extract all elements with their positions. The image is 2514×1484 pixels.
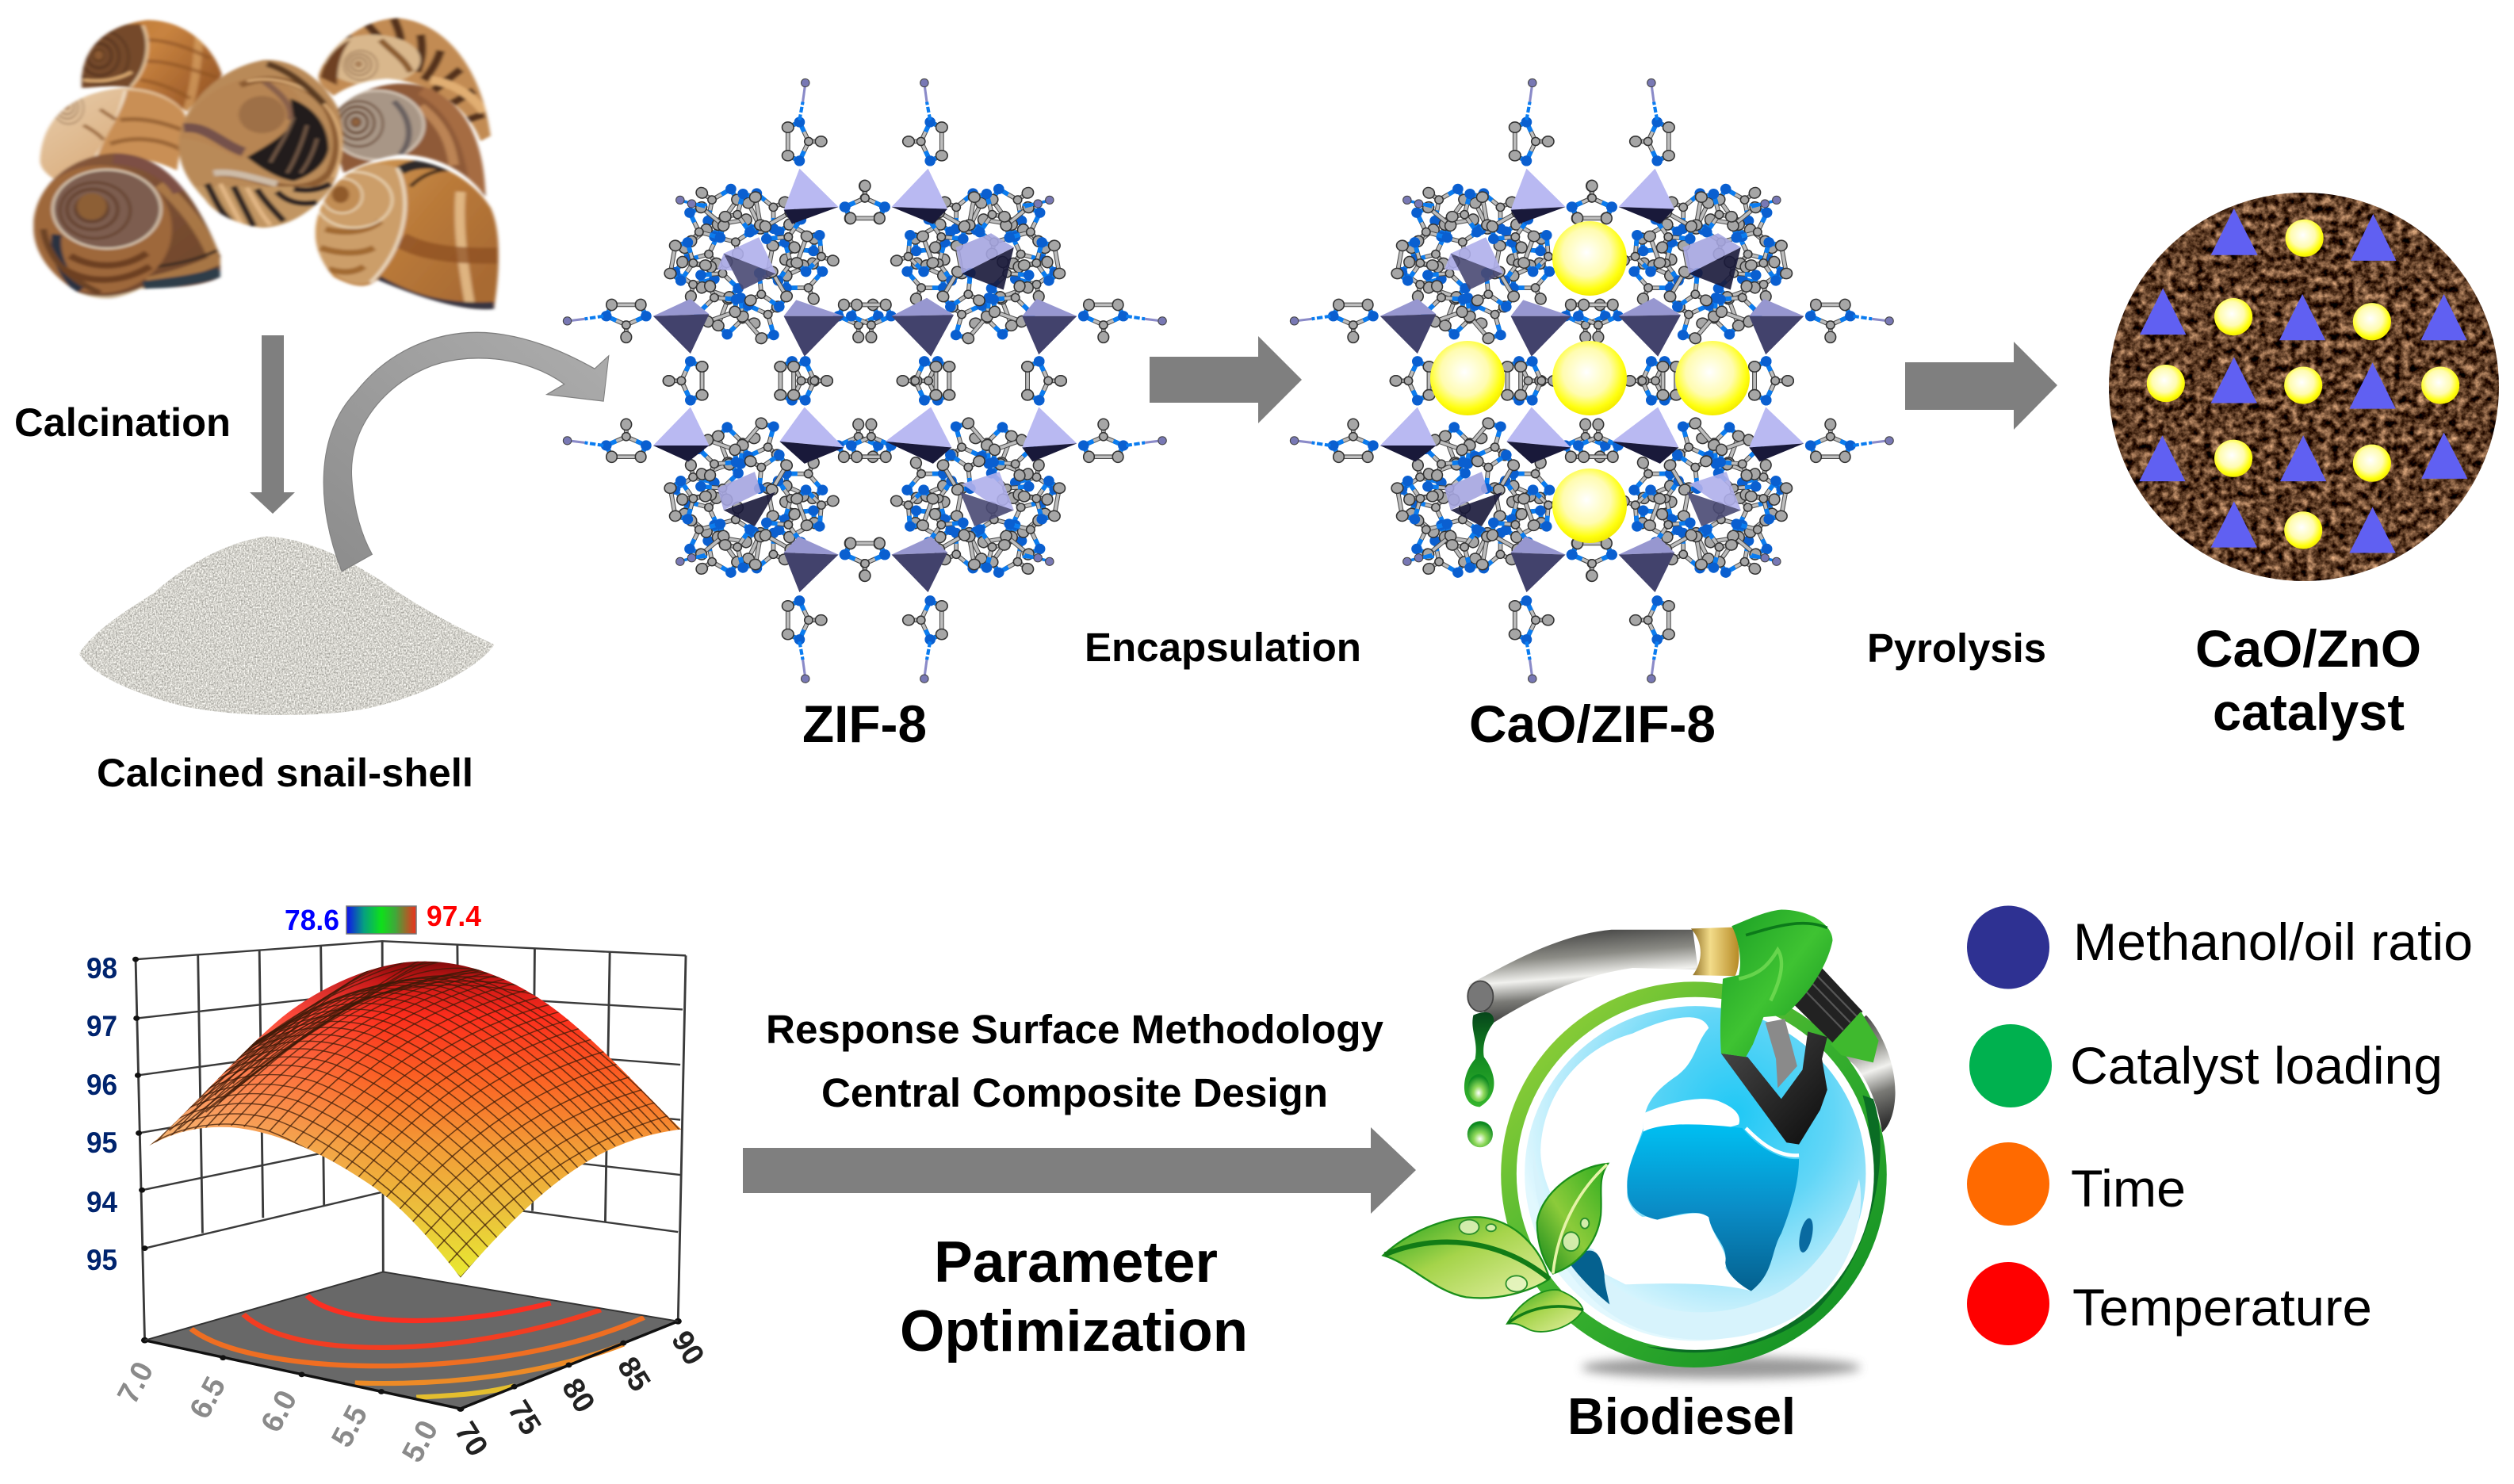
x axis labels: temperature: 70 bbox=[448, 1417, 494, 1463]
y axis labels: 96 bbox=[86, 1069, 117, 1101]
x axis labels: temperature bbox=[448, 1325, 710, 1463]
arrow: optimization to biodiesel bbox=[743, 1127, 1416, 1214]
label: Encapsulation: Encapsulation bbox=[1085, 625, 1361, 670]
y axis labels: 98 bbox=[86, 952, 117, 985]
icon: biodiesel globe with fuel nozzle bbox=[1383, 910, 1896, 1379]
x axis labels: temperature: 80 bbox=[555, 1373, 601, 1419]
plot: walls, floor and surface bbox=[132, 940, 687, 1412]
label: CaO/ZIF-8: CaO/ZIF-8 bbox=[1469, 694, 1716, 753]
x axis labels: ratio: 7.0 bbox=[111, 1356, 160, 1409]
legend item: catalyst loading bbox=[1969, 1024, 2443, 1107]
legend item: temperature: Temperature bbox=[2072, 1278, 2372, 1337]
legend item: methanol/oil ratio: Methanol/oil ratio bbox=[2073, 912, 2473, 971]
label: Central Composite Design: Central Composite Design bbox=[821, 1070, 1328, 1115]
x axis labels: ratio: 6.5 bbox=[183, 1371, 232, 1425]
legend item: time bbox=[1967, 1142, 2186, 1226]
arrow: encapsulation bbox=[1150, 336, 1302, 423]
label: ZIF-8: ZIF-8 bbox=[802, 694, 927, 753]
y axis labels: 94 bbox=[86, 1186, 117, 1218]
legend item: temperature bbox=[1967, 1262, 2372, 1345]
photo: snail shells bbox=[29, 16, 503, 312]
label: Biodiesel: Biodiesel bbox=[1567, 1387, 1796, 1445]
label: CaO/ZnO catalyst bbox=[2195, 619, 2421, 741]
photo: calcined powder heap bbox=[78, 537, 494, 715]
label: Parameter Optimization: Parameter bbox=[934, 1230, 1218, 1295]
ZIF-8 framework bbox=[563, 78, 1166, 683]
y axis labels: 95 bbox=[86, 1244, 117, 1276]
label: Calcined snail-shell: Calcined snail-shell bbox=[97, 751, 473, 795]
CaO/ZnO catalyst particle bbox=[2109, 193, 2499, 581]
x axis labels: ratio: 6.0 bbox=[254, 1385, 304, 1438]
label: CaO/ZnO catalyst: CaO/ZnO bbox=[2195, 619, 2421, 678]
y axis labels bbox=[86, 952, 117, 1276]
x axis labels: ratio bbox=[111, 1356, 445, 1468]
legend item: time: Time bbox=[2071, 1159, 2186, 1218]
colour scale: 78.6 bbox=[285, 904, 339, 936]
arrow: calcination bbox=[250, 335, 295, 514]
x axis labels: temperature: 75 bbox=[501, 1395, 547, 1441]
legend item: methanol/oil ratio bbox=[1967, 905, 2473, 989]
legend item: catalyst loading: Catalyst loading bbox=[2070, 1036, 2443, 1095]
label: Parameter Optimization bbox=[900, 1230, 1248, 1364]
label: Pyrolysis: Pyrolysis bbox=[1867, 625, 2046, 671]
label: CaO/ZnO catalyst: catalyst bbox=[2213, 683, 2405, 741]
x axis labels: temperature: 90 bbox=[664, 1325, 710, 1371]
arrow: curved to ZIF-8 bbox=[323, 332, 609, 572]
colour scale: 97.4 bbox=[427, 900, 481, 932]
chart: 3D response surface bbox=[87, 905, 703, 1462]
x axis labels: ratio: 5.5 bbox=[325, 1400, 374, 1453]
label: Calcination: Calcination bbox=[14, 400, 231, 445]
label: Parameter Optimization: Optimization bbox=[900, 1299, 1248, 1364]
arrow: pyrolysis bbox=[1905, 342, 2057, 430]
y axis labels: 97 bbox=[86, 1010, 117, 1042]
y axis labels: 95 bbox=[86, 1126, 117, 1159]
colour scale bbox=[285, 900, 481, 936]
legend: parameters bbox=[1967, 905, 2473, 1345]
label: Response Surface Methodology: Response Surface Methodology bbox=[766, 1007, 1384, 1052]
x axis labels: temperature: 85 bbox=[610, 1352, 656, 1398]
x axis labels: ratio: 5.0 bbox=[396, 1415, 445, 1468]
CaO/ZIF-8 framework with CaO spheres bbox=[1290, 78, 1893, 683]
